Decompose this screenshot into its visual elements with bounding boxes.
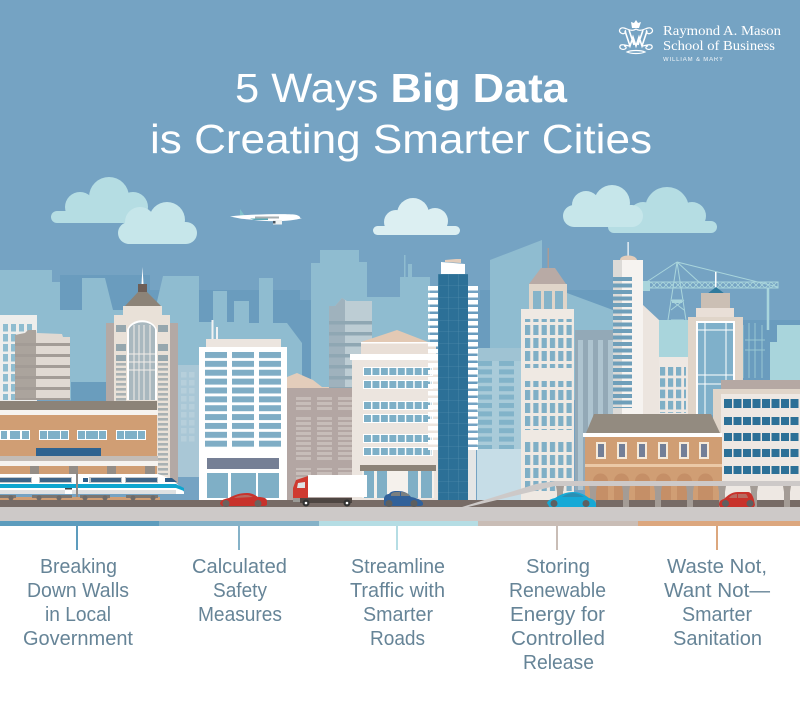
building: translucent block: [178, 365, 199, 477]
column 1: Breaking Down Walls: [23, 526, 133, 650]
column 1: Breaking Down Walls: in Local: [45, 604, 111, 626]
logo wordmark: [663, 23, 781, 63]
building: art deco spire tower: [106, 267, 178, 483]
column 1: Breaking Down Walls: Down Walls: [27, 580, 129, 602]
far skyline silhouette: [0, 275, 800, 400]
building: low block behind crane: [659, 357, 688, 415]
column 4: Storing Renewable Energy: [509, 526, 606, 674]
column 2: Calculated Safety: Measures: [198, 604, 282, 626]
building: far-left white tower: [0, 315, 37, 405]
title: 5 Ways Big Data: [235, 65, 568, 111]
logo wordmark: Raymond A. Mason: [663, 23, 781, 38]
column 1: Breaking Down Walls: Breaking: [40, 556, 117, 578]
column 5: Waste Not: Want Not—: [664, 580, 770, 602]
icon: royal cipher: [620, 20, 652, 54]
building: light blue banded block: [477, 348, 522, 500]
column 3: Streamline Traffic: Streamline: [351, 556, 445, 578]
building: white slim tower: [613, 242, 659, 415]
column 2: Calculated Safety: Calculated: [192, 556, 287, 578]
train: [0, 473, 184, 500]
sky background: [0, 0, 800, 522]
building: brown block: [287, 373, 353, 500]
car: red sedan: [220, 493, 267, 507]
building: cream office: [350, 330, 445, 500]
column 5: Waste Not: Smarter: [682, 604, 752, 626]
building: striped tan tower: [15, 330, 70, 400]
colour bar: [0, 521, 800, 526]
road: [0, 500, 800, 507]
building: glass dome tower: [688, 272, 743, 415]
column 5: Waste Not: [664, 526, 770, 650]
cloud 3: [373, 198, 460, 235]
column 3: Streamline Traffic: [350, 526, 445, 650]
elevated roadway: [462, 481, 800, 507]
building: right office block: [713, 380, 800, 500]
column 4: Storing Renewable Energy: Energy for: [510, 604, 605, 626]
cloud 5: [608, 187, 717, 233]
logo: Raymond A. Mason School of Business: [620, 20, 781, 63]
column 3: Streamline Traffic: Smarter: [363, 604, 433, 626]
building: station: [0, 401, 158, 474]
clouds: [51, 177, 717, 244]
column 4: Storing Renewable Energy: Release: [523, 652, 594, 674]
car: red hatchback: [719, 492, 755, 507]
column 4: Storing Renewable Energy: Controlled: [511, 628, 605, 650]
icon: airplane: [230, 209, 302, 224]
cloud 2: [118, 202, 197, 244]
column 3: Streamline Traffic: Traffic with: [350, 580, 445, 602]
truck: [293, 475, 367, 506]
column 4: Storing Renewable Energy: Storing: [526, 556, 590, 578]
column 4: Storing Renewable Energy: Renewable: [509, 580, 606, 602]
logo wordmark: WILLIAM & MARY: [663, 57, 723, 63]
building: cream high-rise: [521, 248, 574, 500]
column 5: Waste Not: Sanitation: [673, 628, 762, 650]
car: blue hatchback: [384, 491, 423, 507]
column 1: Breaking Down Walls: Government: [23, 628, 133, 650]
road deck: [0, 507, 800, 521]
building: low blue block: [71, 382, 107, 402]
mid skyline: light buildings: [0, 240, 613, 400]
cloud 4: [563, 185, 643, 227]
building: white office: [199, 320, 287, 500]
building: blue glass tower: [428, 259, 478, 500]
column 3: Streamline Traffic: Roads: [370, 628, 425, 650]
title: is Creating Smarter Cities: [150, 116, 652, 162]
building: grey striped tower: [575, 330, 613, 490]
building: brick hall: [583, 414, 722, 500]
car: cyan sedan: [547, 492, 596, 508]
construction crane: [640, 262, 778, 378]
column 2: Calculated Safety: Safety: [213, 580, 267, 602]
building: mid grey-blue striped tower: [329, 298, 372, 388]
column 2: Calculated Safety: [192, 526, 287, 626]
cloud 1: [51, 177, 148, 223]
logo wordmark: School of Business: [663, 38, 775, 53]
column 5: Waste Not: Waste Not,: [667, 556, 767, 578]
title: [150, 65, 652, 162]
pale buildings behind crane: [658, 320, 800, 382]
